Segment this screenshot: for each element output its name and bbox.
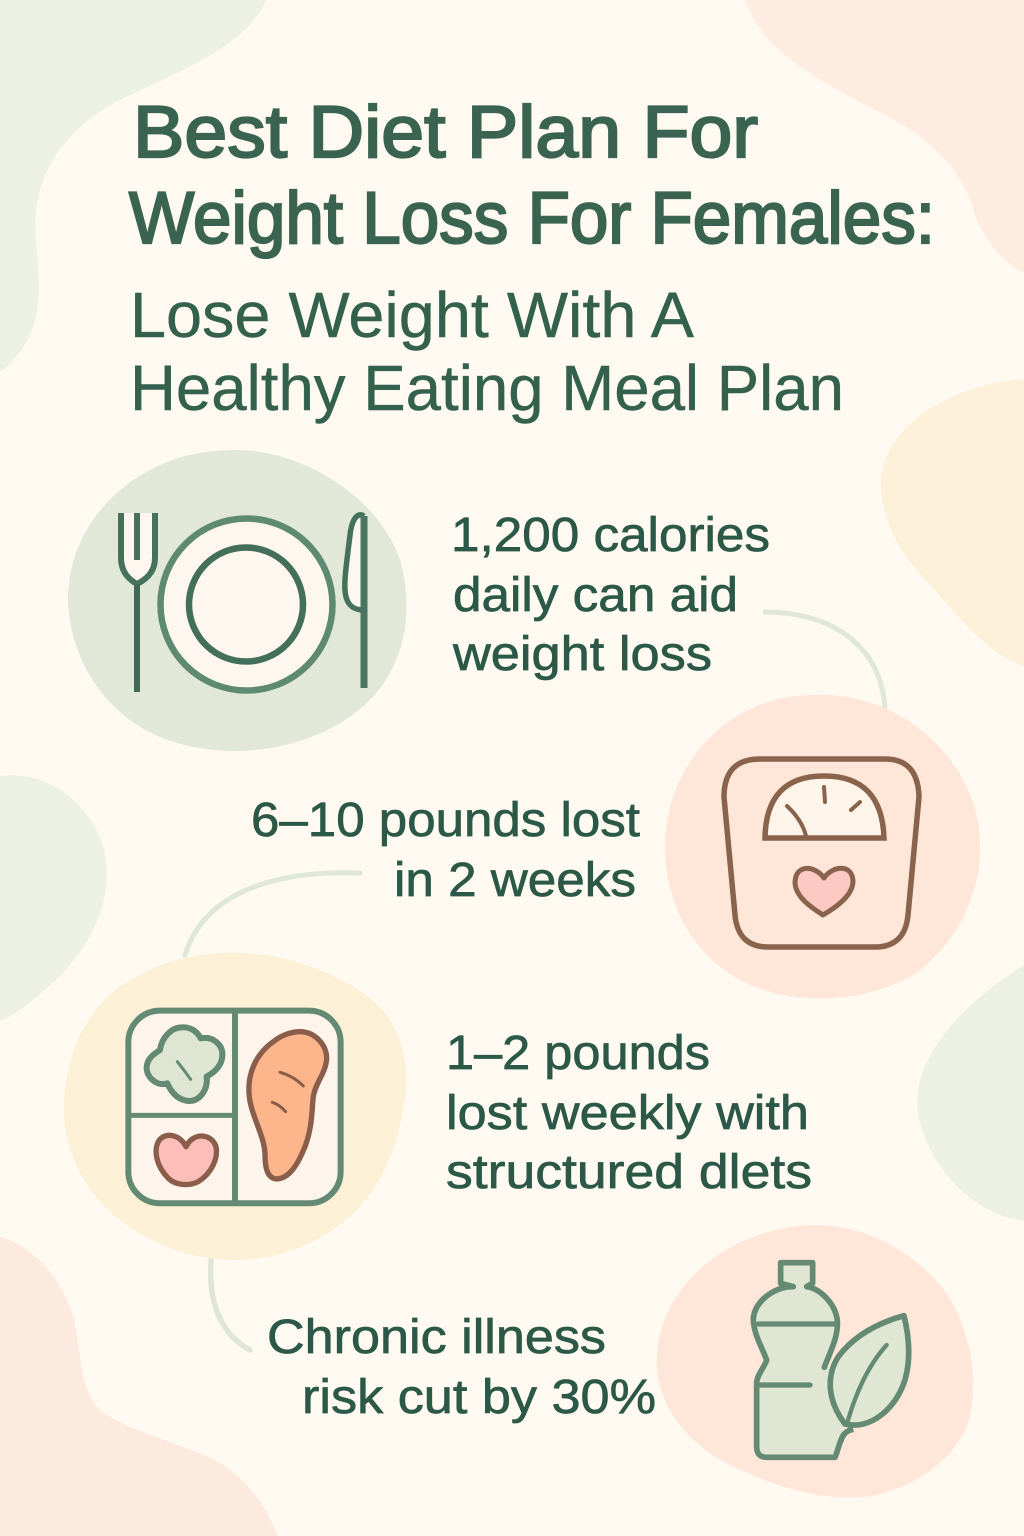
text: chronic illness: Chronic illness bbox=[267, 1310, 606, 1364]
icon: bathroom scale with heart bbox=[665, 695, 980, 998]
text: calories: daily can aid bbox=[453, 568, 738, 622]
icon: meal box with broccoli, chicken and heart bbox=[64, 953, 406, 1260]
text: pounds lost in 2 weeks: in 2 weeks bbox=[394, 853, 636, 907]
text: weekly loss: 1–2 pounds bbox=[446, 1026, 710, 1080]
connector: pounds lost to meal box bbox=[185, 873, 360, 955]
icon: plate with fork and knife bbox=[68, 450, 407, 751]
text: pounds lost in 2 weeks bbox=[251, 793, 641, 907]
subtitle: Healthy Eating Meal Plan bbox=[130, 352, 844, 424]
text: weekly loss: structured dlets bbox=[446, 1145, 812, 1199]
text: pounds lost in 2 weeks: 6–10 pounds lost bbox=[251, 793, 641, 847]
subtitle bbox=[130, 279, 844, 424]
text: calories: weight loss bbox=[452, 627, 712, 681]
text: weekly loss bbox=[446, 1026, 812, 1199]
title bbox=[129, 92, 935, 259]
chicken bbox=[249, 1032, 327, 1179]
connector: meal box to chronic illness bbox=[211, 1260, 250, 1350]
icon: water bottle and leaf bbox=[657, 1225, 973, 1497]
heart bbox=[156, 1135, 216, 1185]
text: chronic illness bbox=[267, 1310, 656, 1424]
connector: calories to scale bbox=[765, 612, 885, 708]
text: calories: 1,200 calories bbox=[451, 508, 770, 562]
title: Best Diet Plan For bbox=[133, 92, 758, 173]
text: calories bbox=[451, 508, 770, 681]
broccoli bbox=[147, 1027, 222, 1101]
title: Weight Loss For Females: bbox=[129, 178, 935, 259]
text: weekly loss: lost weekly with bbox=[446, 1086, 809, 1140]
text: chronic illness: risk cut by 30% bbox=[302, 1370, 656, 1424]
subtitle: Lose Weight With A bbox=[130, 279, 694, 351]
